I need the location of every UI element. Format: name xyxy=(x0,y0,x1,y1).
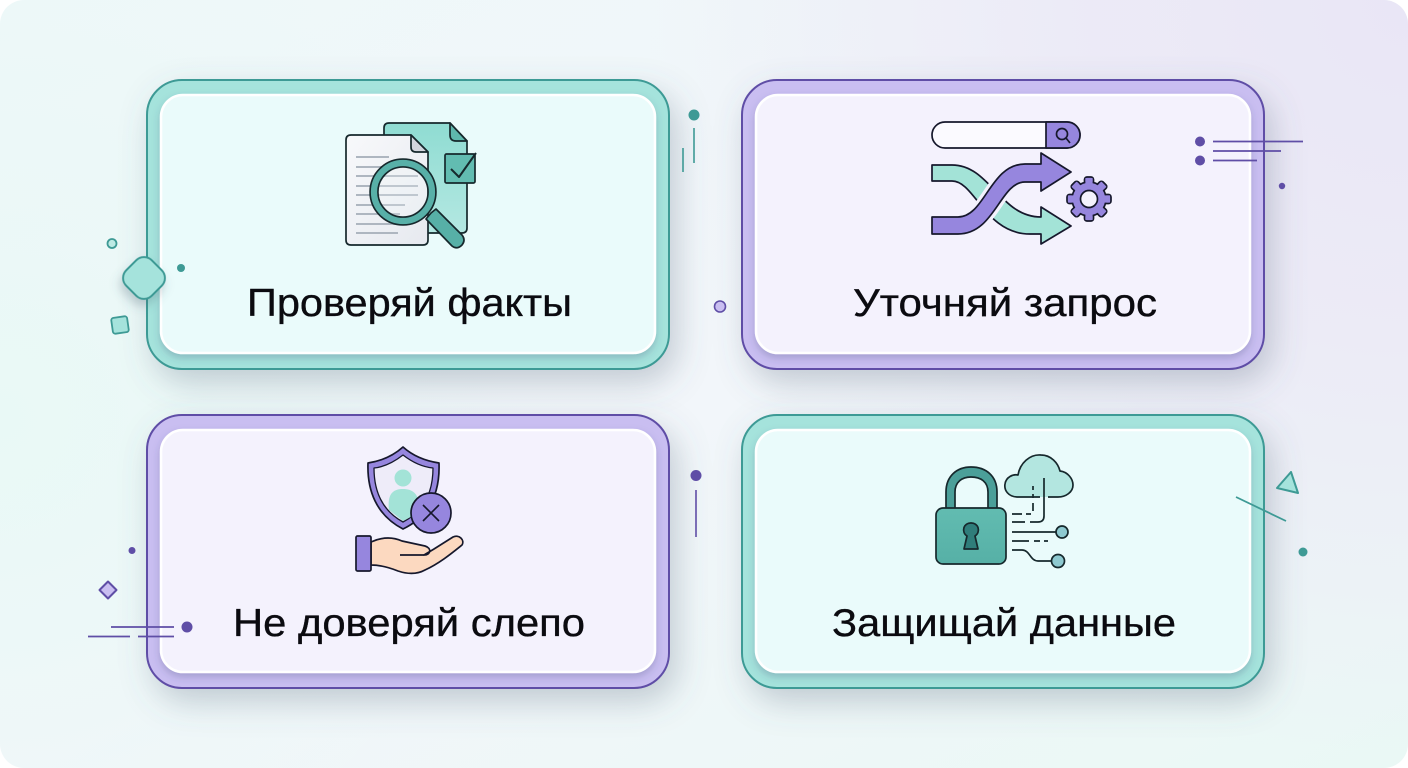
decoration: purple lines top right xyxy=(1195,136,1303,189)
panel: уточняй запрос xyxy=(742,80,1264,369)
decoration: purple dot centre xyxy=(714,301,726,312)
label: не доверяй слепо: Не доверяй слепо xyxy=(233,602,585,645)
label: защищай данные: Защищай данные xyxy=(832,602,1176,645)
decoration: teal accents top centre xyxy=(683,110,700,172)
decoration: purple shapes bottom left xyxy=(88,547,192,636)
panel: не доверяй слепо xyxy=(147,415,669,688)
icon: documents with magnifier xyxy=(346,123,476,248)
panel: защищай данные xyxy=(742,415,1264,688)
panel: проверяй факты xyxy=(147,80,669,369)
label: проверяй факты: Проверяй факты xyxy=(247,282,572,325)
icon: padlock, cloud and circuit xyxy=(936,455,1073,568)
label: уточняй запрос: Уточняй запрос xyxy=(853,282,1157,325)
decoration: teal shapes left xyxy=(108,239,185,334)
decoration: purple accent bottom centre xyxy=(690,470,702,537)
icon: search, crossing arrows and gear xyxy=(932,122,1111,244)
decoration: teal triangle and line right xyxy=(1236,472,1308,556)
icon: shield, person and hand xyxy=(356,447,463,574)
